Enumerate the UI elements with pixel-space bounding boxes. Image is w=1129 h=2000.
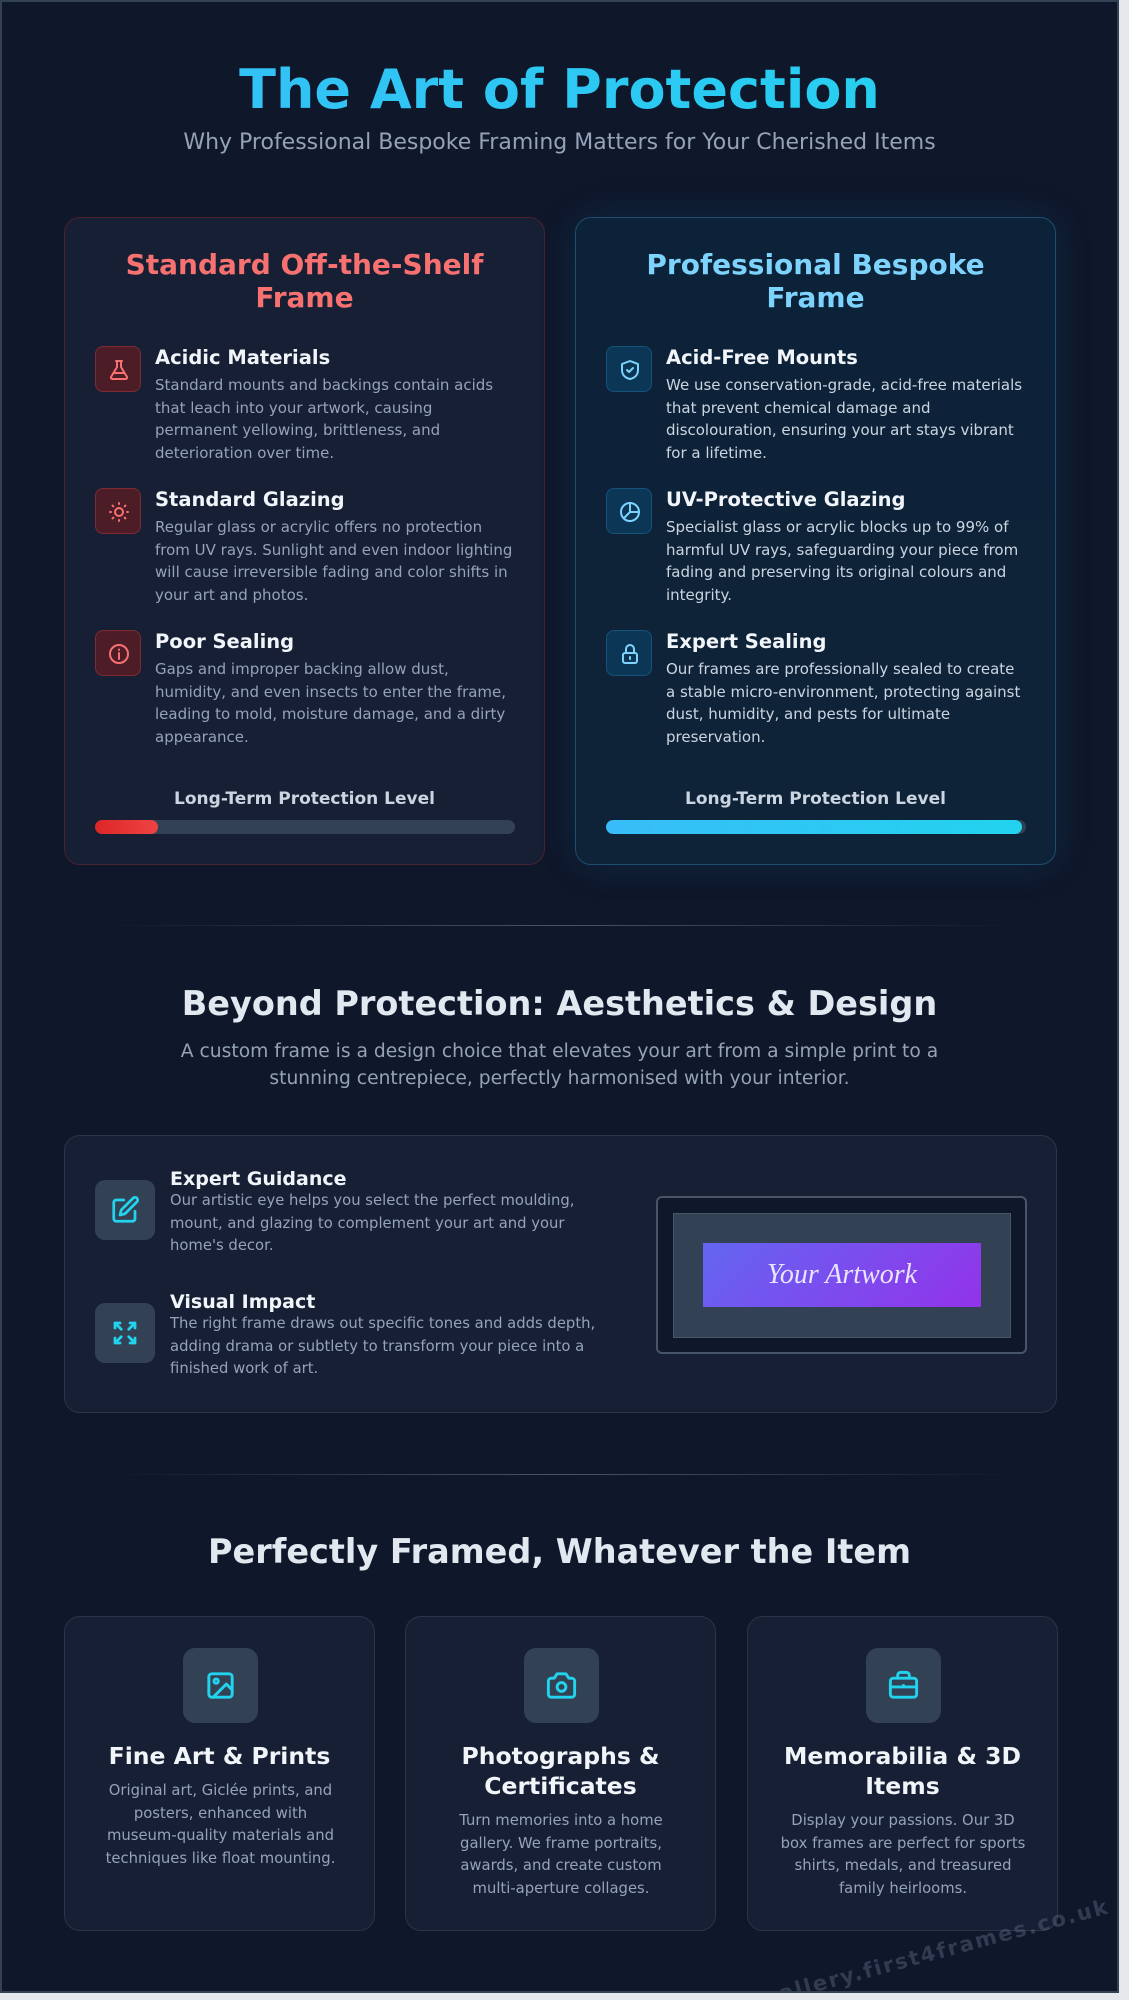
item: visual impact: The right frame draws out specific tones and adds depth, adding drama or subtlety to transform your piece into a finished work of art. <box>170 1315 595 1377</box>
icon: flask <box>95 346 141 392</box>
icon: lock <box>606 630 652 676</box>
icon: info <box>95 630 141 676</box>
icon: camera <box>524 1648 599 1723</box>
heading: standard frame: Frame <box>255 281 354 314</box>
icon: shield <box>606 346 652 392</box>
card: photographs: Certificates <box>484 1772 637 1800</box>
item: expert sealing <box>606 630 1020 746</box>
heading: perfectly framed: Perfectly Framed, Whatever the Item <box>208 1532 911 1571</box>
item: acid-free mounts: We use conservation-grade, acid-free materials that prevent chemical damage and discolouration, ensuring your art stays vibrant for a lifetime. <box>666 376 1022 462</box>
artwork label <box>703 1243 981 1307</box>
item: expert guidance: Expert Guidance <box>170 1168 347 1190</box>
item: acidic materials: Acidic Materials <box>155 346 330 369</box>
title: The Art of Protection <box>239 58 880 121</box>
card: photographs: Photographs & <box>462 1742 659 1770</box>
card: memorabilia: Memorabilia & 3D <box>784 1742 1021 1770</box>
heading: bespoke frame <box>646 248 985 314</box>
title <box>2 58 1117 122</box>
item: expert guidance: Our artistic eye helps you select the perfect moulding, mount, and glazing to complement your art and your home's decor. <box>170 1192 574 1254</box>
item: poor sealing: Poor Sealing <box>155 630 294 653</box>
item: standard glazing: Standard Glazing <box>155 488 345 511</box>
heading: beyond protection: Beyond Protection: Aesthetics & Design <box>182 984 937 1023</box>
card: memorabilia: Display your passions. Our 3D box frames are perfect for sports shirts, medals, and treasured family heirlooms. <box>781 1812 1025 1897</box>
item: acidic materials <box>95 346 493 462</box>
item: visual impact <box>95 1291 595 1377</box>
item: visual impact: Visual Impact <box>170 1291 315 1313</box>
item: expert guidance <box>95 1168 574 1254</box>
heading: bespoke frame: Professional Bespoke <box>646 248 985 281</box>
item: uv glazing <box>606 488 1018 604</box>
card: fine art: Original art, Giclée prints, and posters, enhanced with museum-quality materials and techniques like float mounting. <box>106 1782 335 1867</box>
item: uv glazing: UV-Protective Glazing <box>666 488 905 511</box>
item: standard glazing <box>95 488 512 604</box>
label: protection level: Long-Term Protection Level <box>685 789 946 809</box>
illustration: framed artwork <box>656 1196 1027 1354</box>
panel: bespoke frame <box>575 217 1056 865</box>
item: acidic materials: Standard mounts and backings contain acids that leach into your artwork, causing permanent yellowing, brittleness, and deterioration over time. <box>155 376 493 462</box>
card: memorabilia <box>747 1616 1058 1931</box>
heading: bespoke frame: Frame <box>766 281 865 314</box>
label: protection level: Long-Term Protection Level <box>174 789 435 809</box>
artwork label: Your Artwork <box>767 1259 917 1290</box>
subtitle: Why Professional Bespoke Framing Matters for Your Cherished Items <box>183 130 936 155</box>
icon: briefcase <box>866 1648 941 1723</box>
panel: aesthetics <box>64 1135 1057 1413</box>
item: standard glazing: Regular glass or acrylic offers no protection from UV rays. Sunlight and even indoor lighting will cause irreversible fading and color shifts in your art and photos. <box>155 518 512 604</box>
icon: image <box>183 1648 258 1723</box>
card: fine art <box>64 1616 375 1931</box>
item: expert sealing: Our frames are professionally sealed to create a stable micro-environment, protecting against dust, humidity, and pests for ultimate preservation. <box>666 660 1020 746</box>
icon: sun <box>95 488 141 534</box>
item: acid-free mounts <box>606 346 1022 462</box>
heading: standard frame <box>126 248 484 314</box>
icon: edit <box>95 1180 155 1240</box>
card: photographs: Turn memories into a home gallery. We frame portraits, awards, and create custom multi-aperture collages. <box>459 1812 663 1897</box>
bar: high protection <box>606 820 1026 834</box>
item: acid-free mounts: Acid-Free Mounts <box>666 346 858 369</box>
panel: standard frame <box>64 217 545 865</box>
item: expert sealing: Expert Sealing <box>666 630 826 653</box>
icon: aperture <box>606 488 652 534</box>
item: poor sealing: Gaps and improper backing allow dust, humidity, and even insects to enter the frame, leading to mold, moisture damage, and a dirty appearance. <box>155 660 506 746</box>
text: beyond protection intro: A custom frame is a design choice that elevates your art from a simple print to a stunning centrepiece, perfectly harmonised with your interior. <box>181 1041 938 1089</box>
bar: low protection <box>95 820 515 834</box>
card: memorabilia: Items <box>865 1772 940 1800</box>
card: photographs <box>405 1616 716 1931</box>
icon: expand arrows <box>95 1303 155 1363</box>
item: poor sealing <box>95 630 506 746</box>
card: fine art: Fine Art & Prints <box>109 1742 330 1770</box>
item: uv glazing: Specialist glass or acrylic blocks up to 99% of harmful UV rays, safeguarding your piece from fading and preserving its original colours and integrity. <box>666 518 1018 604</box>
heading: standard frame: Standard Off-the-Shelf <box>126 248 483 281</box>
